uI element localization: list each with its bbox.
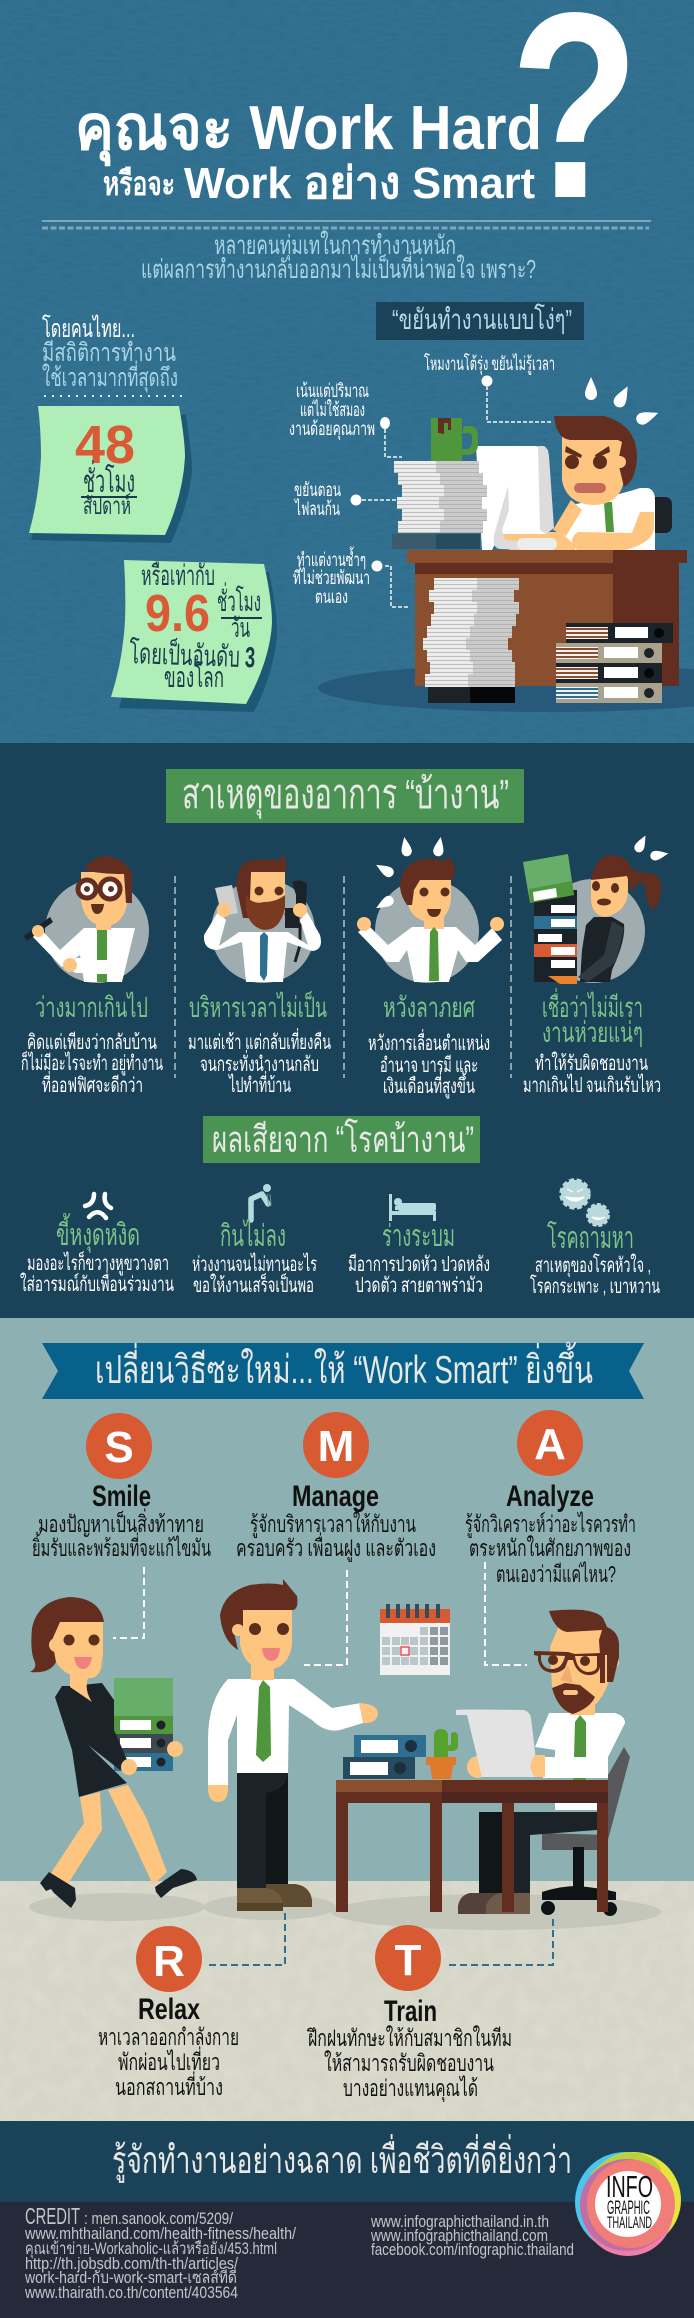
illustration: man expecting fame: [357, 836, 504, 983]
step T: train: T: [395, 1936, 422, 1985]
sticky note: 9.6 hours: โดยเป็นอันดับ 3: [129, 635, 256, 674]
step M: manage: Manage: [292, 1480, 379, 1513]
credit sources: : men.sanook.com/5209/: [84, 2210, 233, 2228]
step T: train: ให้สามารถรับผิดชอบงาน: [324, 2050, 494, 2076]
step R: relax: หาเวลาออกกำลังกาย: [98, 2024, 239, 2050]
paper stack on desk: [392, 461, 487, 549]
effect text: irritable: มองอะไรก็ขวางหูขวางตา: [27, 1249, 169, 1276]
effect text: illnesses: โรคถามหา: [547, 1220, 634, 1255]
step M: manage: รู้จักบริหารเวลาให้กับงาน: [250, 1511, 416, 1538]
column text: too free: คิดแต่เพียงว่ากลับบ้าน: [27, 1031, 157, 1054]
chair back: [640, 497, 672, 533]
callout: last-minute diligence: [294, 479, 396, 519]
icon: sweat drops: [374, 836, 446, 913]
credit sources: [24, 2203, 296, 2302]
website links: [370, 2213, 574, 2259]
illustration: woman carrying binders: [30, 1597, 197, 1908]
effect text: body aches: ปวดตัว สายตาพร่ามัว: [355, 1274, 483, 1297]
effect text: illnesses: [530, 1220, 660, 1298]
callout: quantity over quality: เน้นแต่ปริมาณ: [296, 380, 369, 401]
step A: analyze: A: [534, 1420, 566, 1469]
title: หรือจะ: [103, 165, 175, 202]
callout: overnight work: โหมงานโต้รุ่ง ขยันไม่รู้เวลา: [424, 353, 555, 376]
callout: overnight work: [424, 353, 555, 422]
column text: poor time management: [188, 990, 331, 1097]
heading: working hard the dumb way: “ขยันทำงานแบบโง่ๆ”: [392, 303, 572, 335]
step T: train: บางอย่างแทนคุณได้: [343, 2075, 478, 2102]
sticky note: 9.6 hours: [111, 560, 277, 712]
column text: distrust of others: [523, 988, 661, 1097]
illustration: standing man presenting: [208, 1579, 378, 1911]
icon: germs: [561, 1180, 608, 1226]
icon: person in bed: [389, 1194, 436, 1221]
step T: train: [307, 1925, 512, 2102]
column text: poor time management: มาแต่เช้า แต่กลับเที่ยงคืน: [188, 1028, 331, 1054]
white connector lines: [113, 1562, 527, 1665]
icon: angry mark: [85, 1194, 111, 1218]
sticky note: 9.6 hours: วัน: [231, 613, 250, 643]
man body: [499, 416, 655, 551]
illustration: seated bearded man: [456, 1610, 625, 1914]
panel: footer: [0, 2202, 694, 2318]
step A: analyze: ตนเองว่ามีแค่ไหน?: [496, 1561, 616, 1587]
column text: hoping for rank: [368, 992, 490, 1099]
column text: poor time management: บริหารเวลาไม่เป็น: [189, 990, 327, 1023]
step R: relax: Relax: [138, 1993, 200, 2026]
step R: relax: นอกสถานที่บ้าง: [115, 2071, 223, 2100]
heading: causes of workaholism: สาเหตุของอาการ “บ้างาน”: [182, 771, 509, 819]
sticky note: 9.6 hours: 9.6: [145, 585, 210, 643]
illustration: woman overloaded with binders: [523, 833, 669, 984]
effect text: no appetite: ห่วงงานจนไม่ทานอะไร: [192, 1252, 317, 1276]
column dividers: [175, 876, 511, 1078]
illustration: chair: [541, 1747, 630, 1916]
sticky note: 48 hours: 48: [75, 415, 135, 475]
heading: effects of workaholism: [203, 1116, 480, 1163]
step A: analyze: [465, 1410, 636, 1587]
callout: quantity over quality: งานด้อยคุณภาพ: [289, 418, 375, 441]
step R: relax: R: [153, 1937, 185, 1986]
sticky note: 9.6 hours: ของโลก: [164, 660, 224, 694]
effect text: body aches: มีอาการปวดหัว ปวดหลัง: [348, 1253, 490, 1276]
paper stack under desk: [423, 578, 519, 703]
icon: cactus: [426, 1729, 458, 1779]
step S: smile: Smile: [92, 1480, 151, 1513]
connector lines to R and T: [209, 1913, 553, 1965]
title: Work อย่าง Smart: [184, 159, 535, 208]
credit sources: คุณเข้าข่าย-Workaholic-แล้วหรือยัง/453.html: [25, 2240, 277, 2259]
step R: relax: [98, 1926, 239, 2100]
title: [75, 94, 542, 208]
step A: analyze: Analyze: [506, 1480, 594, 1513]
panel: causes section background: [0, 743, 694, 1318]
column text: too free: ว่างมากเกินไป: [35, 992, 148, 1023]
callout: repetitive work: [293, 546, 408, 607]
step S: smile: ยิ้มรับและพร้อมที่จะแก้ไขมัน: [32, 1532, 211, 1561]
step M: manage: M: [318, 1422, 354, 1471]
website links: facebook.com/infographic.thailand: [371, 2241, 574, 2259]
step S: smile: มองปัญหาเป็นสิ่งท้าทาย: [38, 1508, 204, 1537]
sticky note: 48 hours: ชั่วโมง: [83, 460, 135, 499]
illustration: meeting desk: [336, 1780, 608, 1912]
logo: infographic thailand: [575, 2152, 681, 2256]
credit sources: work-hard-กับ-work-smart-เซลส์ที่ดี: [24, 2266, 237, 2287]
coffee mug: [431, 418, 478, 461]
sticky note: 9.6 hours: หรือเท่ากับ: [141, 560, 215, 591]
sticky note: 48 hours: [29, 406, 192, 543]
head: [534, 1610, 619, 1715]
monitor: [476, 446, 557, 551]
effect text: irritable: [20, 1213, 174, 1296]
panel: floor background: [0, 1881, 694, 2121]
effect text: body aches: ร่างระบม: [382, 1220, 455, 1253]
column text: too free: ที่ออฟฟิศจะดีกว่า: [42, 1071, 143, 1097]
step M: manage: [236, 1412, 436, 1562]
effect text: no appetite: ขอให้งานเสร็จเป็นพอ: [193, 1271, 314, 1297]
credit sources: http://th.jobsdb.com/th-th/articles/: [25, 2255, 238, 2273]
column text: hoping for rank: เงินเดือนที่สูงขึ้น: [383, 1071, 475, 1099]
logo: infographic thailand: INFO: [606, 2169, 653, 2204]
credit sources: CREDIT: [25, 2203, 80, 2229]
icon: calendar: [380, 1604, 450, 1675]
illustration: busy bearded man with two phones: [204, 853, 321, 983]
website links: www.infographicthailand.com: [370, 2227, 548, 2245]
effect text: body aches: [348, 1220, 490, 1297]
desk: [407, 550, 687, 686]
statistics intro text: โดยคนไทย...: [42, 314, 135, 343]
panel: top section background: [0, 0, 694, 744]
credit sources: www.thairath.co.th/content/403564: [24, 2284, 238, 2302]
column text: hoping for rank: หวังลาภยศ: [383, 992, 475, 1023]
step M: manage: ครอบครัว เพื่อนฝูง และตัวเอง: [236, 1532, 436, 1562]
step T: train: Train: [384, 1995, 437, 2028]
sticky note: 48 hours: สัปดาห์: [83, 492, 131, 520]
effect text: no appetite: กินไม่ลง: [220, 1218, 286, 1253]
step S: smile: [32, 1413, 211, 1561]
step S: smile: S: [104, 1423, 134, 1472]
statistics intro text: ใช้เวลามากที่สุดถึง: [42, 360, 178, 393]
column text: poor time management: ไปทำที่บ้าน: [228, 1071, 291, 1097]
step T: train: ฝึกฝนทักษะให้กับสมาชิกในทีม: [307, 2025, 512, 2051]
heading: causes of workaholism: [166, 769, 524, 823]
panel: work smart section background: [0, 1318, 694, 1881]
callout: last-minute diligence: ไฟลนก้น: [294, 498, 340, 519]
logo: infographic thailand: THAILAND: [607, 2213, 652, 2232]
icon: binders on desk: [343, 1735, 426, 1779]
logo: infographic thailand: GRAPHIC: [607, 2198, 650, 2219]
heading: effects of workaholism: ผลเสียจาก “โรคบ้างาน”: [212, 1118, 474, 1160]
title: คุณจะ Work Hard: [75, 94, 542, 166]
callout: last-minute diligence: ขยันตอน: [294, 479, 341, 500]
step R: relax: พักผ่อนไปเที่ยว: [118, 2046, 220, 2075]
statistics intro text: [42, 314, 183, 396]
illustration: man with glasses and pen: [24, 856, 149, 983]
column text: too free: [21, 992, 163, 1097]
effect text: no appetite: [192, 1218, 317, 1297]
column text: hoping for rank: อำนาจ บารมี และ: [380, 1054, 478, 1077]
illustration: stressed man at desk: [318, 377, 694, 712]
credit sources: www.mhthailand.com/health-fitness/health/: [24, 2225, 296, 2243]
heading: working hard the dumb way: [376, 302, 584, 340]
column text: hoping for rank: หวังการเลื่อนตำแหน่ง: [368, 1029, 490, 1055]
sticky note: 9.6 hours: ชั่วโมง: [217, 582, 261, 617]
binder stack: [556, 623, 673, 703]
effect text: irritable: ใส่อารมณ์กับเพื่อนร่วมงาน: [20, 1270, 174, 1296]
column text: distrust of others: งานห่วยแน่ๆ: [542, 1017, 643, 1048]
callout: quantity over quality: [289, 380, 402, 457]
column text: too free: ก็ไม่มีอะไรจะทำ อยู่ทำงาน: [21, 1049, 163, 1076]
callout: quantity over quality: แต่ไม่ใช้สมอง: [300, 399, 365, 420]
floor shadows: [29, 1893, 661, 1930]
ribbon heading: change the way: [42, 1341, 644, 1399]
icon: sweat drops: [633, 833, 669, 861]
subtitle: หลายคนทุ่มเทในการทำงานหนัก: [214, 230, 456, 261]
website links: www.infographicthailand.in.th: [370, 2213, 549, 2231]
column text: poor time management: จนกระทั่งนำงานกลับ: [200, 1050, 319, 1076]
icon: stooping person: [251, 1184, 271, 1220]
effect text: irritable: ขี้หงุดหงิด: [56, 1213, 140, 1254]
subtitle: [42, 220, 651, 284]
callout: repetitive work: ที่ไม่ช่วยพัฒนา: [293, 565, 370, 588]
statistics intro text: มีสถิติการทำงาน: [42, 339, 176, 367]
callout: repetitive work: ตนเอง: [315, 586, 348, 607]
panel: closing band: [0, 2121, 694, 2202]
callout: repetitive work: ทำแต่งานซ้ำๆ: [297, 546, 366, 570]
icon: sweat drops: [585, 377, 660, 426]
